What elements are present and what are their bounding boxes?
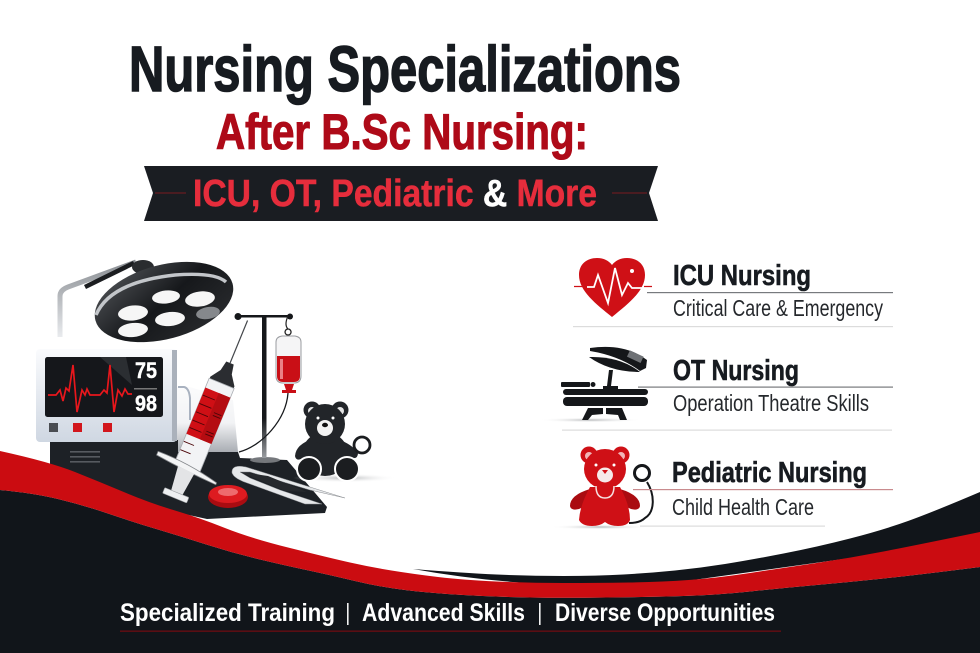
surgical scissors	[232, 466, 345, 504]
icon: heart with ecg	[574, 258, 652, 317]
teddy bear	[293, 402, 397, 482]
panel: pediatric nursing: Pediatric Nursing	[672, 457, 867, 489]
footer text	[120, 599, 781, 632]
dark lower wave	[0, 490, 980, 653]
icon: operating table	[538, 347, 648, 422]
right dark sweep	[413, 492, 980, 586]
panel: OT nursing: Operation Theatre Skills	[673, 390, 869, 416]
red button	[208, 485, 248, 508]
panel: ICU nursing	[573, 258, 893, 327]
subtitle: After B.Sc Nursing:	[216, 104, 588, 160]
panel: OT nursing: OT Nursing	[673, 355, 799, 387]
title: Nursing Specializations	[129, 33, 681, 105]
footer text: Advanced Skills	[362, 599, 525, 627]
footer text: Specialized Training	[120, 599, 335, 627]
panel: ICU nursing: ICU Nursing	[673, 260, 811, 292]
panel: ICU nursing: Critical Care & Emergency	[673, 295, 883, 321]
panel: pediatric nursing	[550, 446, 893, 530]
patient monitor: 98	[135, 391, 157, 416]
iv stand and blood bag	[234, 313, 301, 458]
equipment stand	[50, 387, 327, 519]
icon: red teddy with stethoscope	[550, 446, 653, 530]
panel: pediatric nursing: Child Health Care	[672, 494, 814, 520]
illustration: medical equipment	[36, 248, 397, 519]
syringe	[144, 308, 278, 511]
red wave	[0, 451, 980, 598]
patient monitor: 75	[135, 358, 157, 383]
footer text: Diverse Opportunities	[555, 599, 775, 627]
banner ribbon: ICU, OT, Pediatric & More	[193, 173, 597, 215]
banner ribbon	[144, 166, 658, 221]
bottom swoosh	[0, 451, 980, 653]
panel: OT nursing	[538, 347, 893, 431]
patient monitor	[36, 349, 177, 442]
surgical lamp	[60, 248, 242, 356]
